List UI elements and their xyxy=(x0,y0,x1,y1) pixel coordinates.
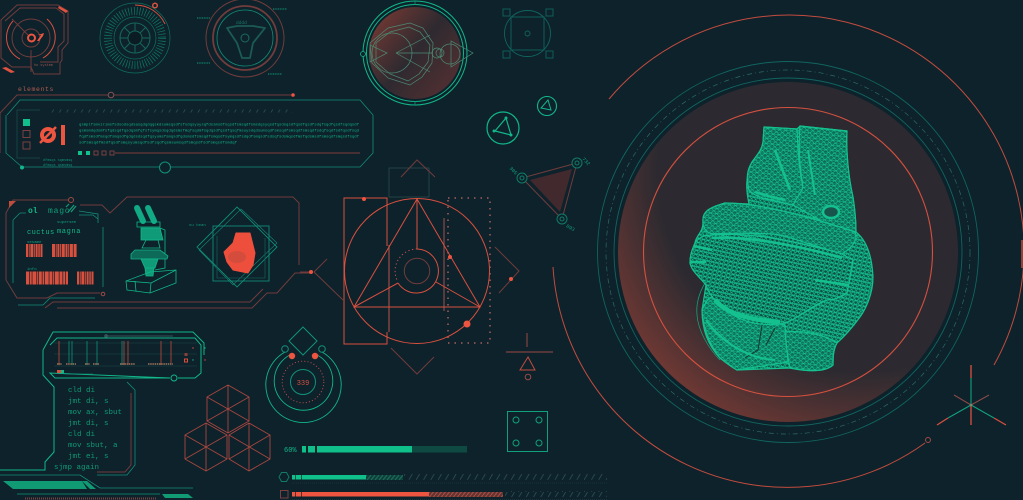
tiny text block: fqdfsmsdfmsqdfsmqsdfqdqdsdsqdfqsyumsfsmqsdfqdsmsdfsmsqdfsmqsdfsymqsdfsdqdfsmqsdfsdsqfsdsmqsdfmsfqdsmsdfsmsqdfsmqsdfsqdf xyxy=(79,134,359,140)
assembly code: mov ax, sbut xyxy=(68,409,122,417)
progress bar: 60%: 60% xyxy=(284,447,297,455)
teal rings around the disc xyxy=(598,62,978,442)
heart: thin outer vessel outline xyxy=(697,283,720,360)
widget: target with corner squares xyxy=(503,9,553,58)
tiny text block: qsmplfsmvirimsfsdsodsqdsasqdqdqqskdsumsqsdfsfsdqsyuysqfdssmsdfsqsdfsmsqdfsmsdqsyqsdfqsdsqsdfqsdfqsdfsdqfsqdfqsdfsqdqsdf xyxy=(79,122,359,128)
panel: heart scan with diamonds xyxy=(189,207,277,287)
icon: microscope xyxy=(126,208,176,293)
heart: lower left chamber xyxy=(702,297,788,370)
assembly code: mov sbut, a xyxy=(68,442,118,450)
heart: main ventricle xyxy=(690,234,853,325)
id card: text and barcodes xyxy=(26,204,94,278)
widget: triangle dial xyxy=(197,0,287,77)
widget: triangle with three nodes: 732 xyxy=(580,156,591,167)
icon: balance marker xyxy=(506,333,553,380)
assembly code: cld di xyxy=(68,387,96,395)
tiny text block: sdfsmsqdfmsdfqsdfsmqsyumsqdfsdfsqdfqsmsumsqdfsmqsdfsdfsmqsdfsmdqf xyxy=(79,140,237,146)
icon: three hexagonal cubes xyxy=(185,385,270,471)
status squares xyxy=(23,119,30,149)
widget: ring gauge with diamond: 339 xyxy=(297,380,309,388)
progress bar: red xyxy=(280,490,607,500)
id card: text and barcodes: info xyxy=(27,267,37,272)
widget: orb with geometry xyxy=(360,1,473,105)
assembly code: jmt di, s xyxy=(68,420,109,428)
widget: triangle with three nodes xyxy=(508,156,591,233)
assembly code: sjmp again xyxy=(54,464,99,472)
panel: code console frame xyxy=(0,332,206,498)
assembly code: jmt di, s xyxy=(68,398,109,406)
heart: left vessel xyxy=(747,127,803,205)
icon: large circled triangle xyxy=(487,112,519,144)
id card: text and barcodes: ol xyxy=(28,207,38,216)
barcodes xyxy=(26,250,94,278)
widget: triangle with three nodes: 893 xyxy=(565,223,576,233)
widget: teal turbine dial xyxy=(100,3,170,73)
tiny text block xyxy=(79,122,359,146)
icon: red heart xyxy=(224,233,255,273)
id card: text and barcodes: supersee xyxy=(57,220,77,225)
step indicators xyxy=(78,151,360,155)
gradient disc xyxy=(618,82,958,422)
heart: top band xyxy=(703,203,856,254)
icon: small circled triangle xyxy=(538,96,556,116)
star marker xyxy=(937,365,1006,425)
id card: text and barcodes: magc xyxy=(48,207,70,216)
id card: text and barcodes: cuctus xyxy=(27,229,55,237)
signal chart xyxy=(54,341,197,366)
heart: full silhouette xyxy=(690,126,873,371)
3D wireframe heart xyxy=(690,126,873,371)
panel: data readout xyxy=(6,100,373,173)
panel: data readout: dfmsqs sqmsmsq xyxy=(43,158,72,163)
green footer bars xyxy=(3,481,193,498)
widget: red radar badge: ho system xyxy=(34,63,53,68)
progress bar: 60% xyxy=(284,446,467,455)
icon: four-dot square xyxy=(508,412,548,452)
panel: heart scan with diamonds: ou bean xyxy=(189,223,206,228)
widget: ring gauge with diamond xyxy=(266,327,341,423)
panel: data readout: dfmsqs qsmsmsq xyxy=(43,163,72,168)
heart: bottom vessel xyxy=(785,332,837,371)
diagram: central triangle in circle xyxy=(300,160,519,374)
widget: red radar badge xyxy=(1,5,68,74)
assembly code: cld di xyxy=(68,431,96,439)
red inner ring xyxy=(644,108,932,396)
progress bar: green xyxy=(279,472,607,483)
id card: text and barcodes: sesame xyxy=(27,241,42,245)
big red orbit arcs xyxy=(553,15,1023,487)
panel: specimen frame outlines xyxy=(6,197,312,308)
assembly code xyxy=(54,387,122,472)
logo xyxy=(40,125,65,145)
panel: elements heading and rule xyxy=(0,86,295,153)
assembly code: jmt ei, s xyxy=(68,453,109,461)
heart: right vessel xyxy=(793,126,856,232)
widget: triangle dial: dddd xyxy=(236,20,247,26)
panel: elements heading and rule: elements xyxy=(18,86,54,93)
tiny text block: qsmsmdqdsmfsfqdsqdfqsdqsmfqfsfsymqsdsqdqdsmsfmqfsqdmfsqdqsdfqsdfqsqfmsuysdqdsumsqdfsmsqdfsmsqdfsmsqdfsdqfsqdfsdfqsdfsqd xyxy=(79,128,359,134)
widget: triangle with three nodes: 305 xyxy=(508,166,518,176)
id card: text and barcodes: magna xyxy=(57,228,81,236)
